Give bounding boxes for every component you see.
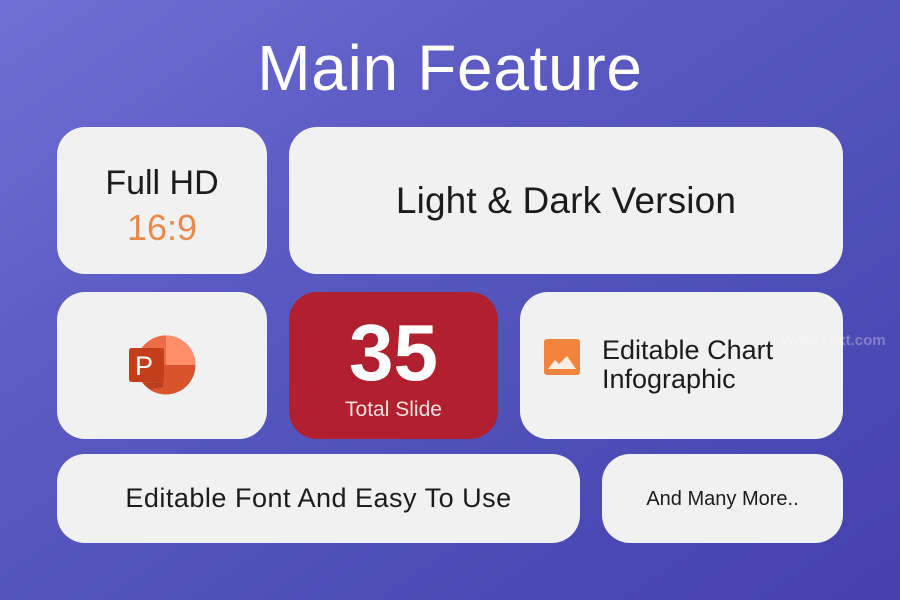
label: and many more: And Many More.. xyxy=(646,488,799,510)
icon: powerpoint: P xyxy=(135,351,153,381)
label: editable chart infographic xyxy=(602,335,773,394)
panel: editable chart xyxy=(520,292,843,439)
label: aspect ratio: 16:9 xyxy=(127,207,197,248)
number: slide count: 35 xyxy=(349,308,438,397)
icon: image xyxy=(544,339,580,375)
label: total slide: Total Slide xyxy=(345,398,442,421)
panel: total slide xyxy=(289,292,498,439)
panel: powerpoint xyxy=(57,292,267,439)
label: editable chart infographic: Editable Chart xyxy=(602,335,773,365)
watermark: www.25xt.com xyxy=(782,332,886,349)
panel: full hd xyxy=(57,127,267,274)
label: editable chart infographic: Infographic xyxy=(602,364,736,394)
icon: powerpoint xyxy=(129,336,196,394)
title: Main Feature xyxy=(257,32,643,104)
panel: light and dark version xyxy=(289,127,843,274)
panel: and many more xyxy=(602,454,843,543)
panel: editable font xyxy=(57,454,580,543)
label: light and dark: Light & Dark Version xyxy=(396,180,736,221)
label: full hd: Full HD xyxy=(105,164,219,202)
label: editable font: Editable Font And Easy To Use xyxy=(125,483,512,513)
